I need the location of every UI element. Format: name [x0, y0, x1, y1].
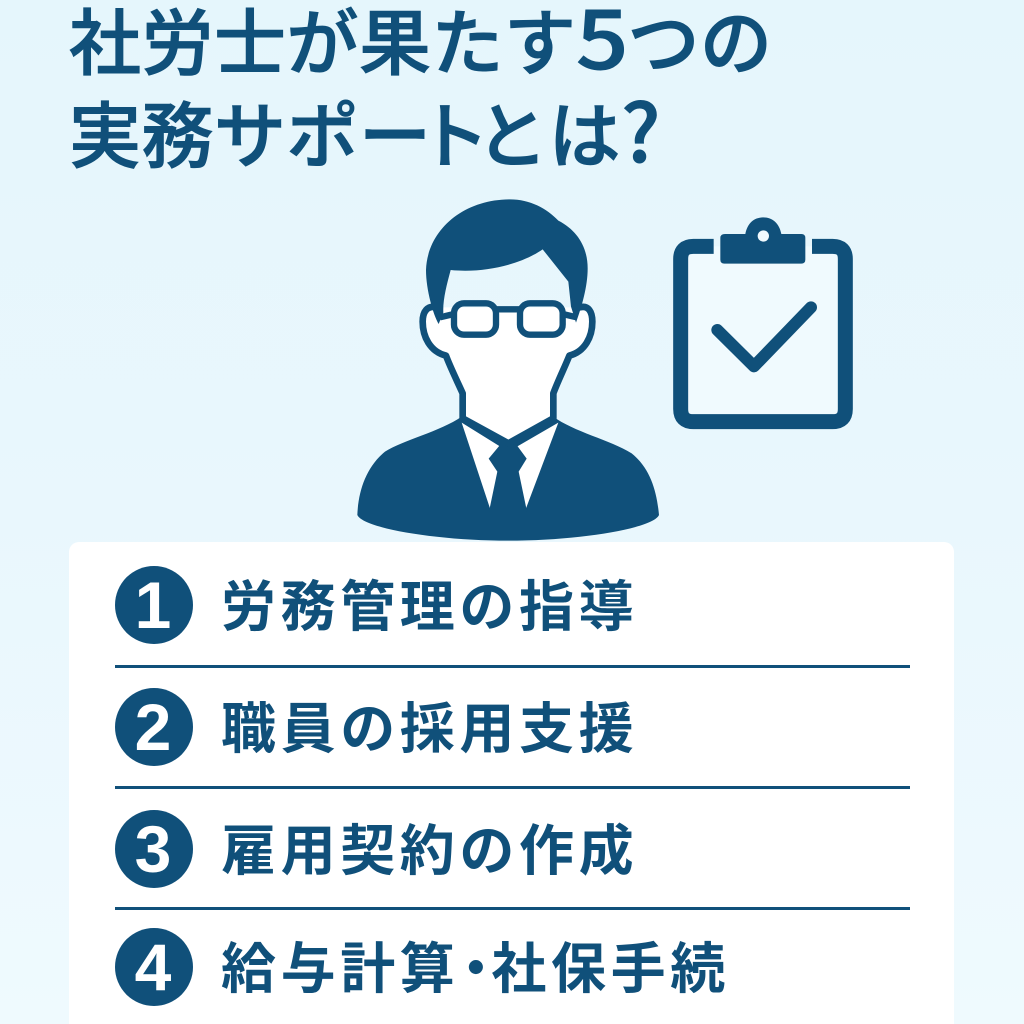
necktie [489, 445, 527, 520]
list item 4 [115, 924, 730, 1006]
label 2: 職員の採用支援 [221, 684, 638, 764]
suit body [357, 417, 659, 541]
glasses [440, 303, 577, 335]
shirt collar [462, 423, 558, 508]
title line 2: 実務サポートとは [69, 78, 621, 183]
number badge 2: 2 [135, 690, 171, 764]
title line 2: ? [621, 70, 661, 186]
panel: list of five supports [69, 542, 954, 1024]
list item 3 [115, 806, 638, 888]
label 1: 労務管理の指導 [221, 562, 638, 642]
icon: clipboard with checkmark [673, 217, 853, 430]
clipboard board [681, 246, 845, 422]
label 4: 給与計算 社保手続 [221, 924, 730, 1004]
clip hole [758, 230, 769, 242]
icon: businessperson with glasses [357, 199, 659, 541]
number badge 4 [115, 928, 193, 1006]
number badge 3: 3 [135, 812, 171, 886]
check mark [717, 307, 811, 366]
number badge 4: 4 [135, 930, 171, 1004]
list item 2 [115, 684, 638, 766]
hair [426, 199, 588, 324]
number badge 1 [115, 566, 193, 644]
title [69, 0, 773, 186]
face and ears [423, 307, 592, 443]
number badge 1: 1 [135, 568, 171, 642]
label 3: 雇用契約の作成 [221, 806, 638, 886]
clip [720, 217, 805, 264]
number badge 3 [115, 810, 193, 888]
list item 1 [115, 562, 638, 644]
number badge 2 [115, 688, 193, 766]
